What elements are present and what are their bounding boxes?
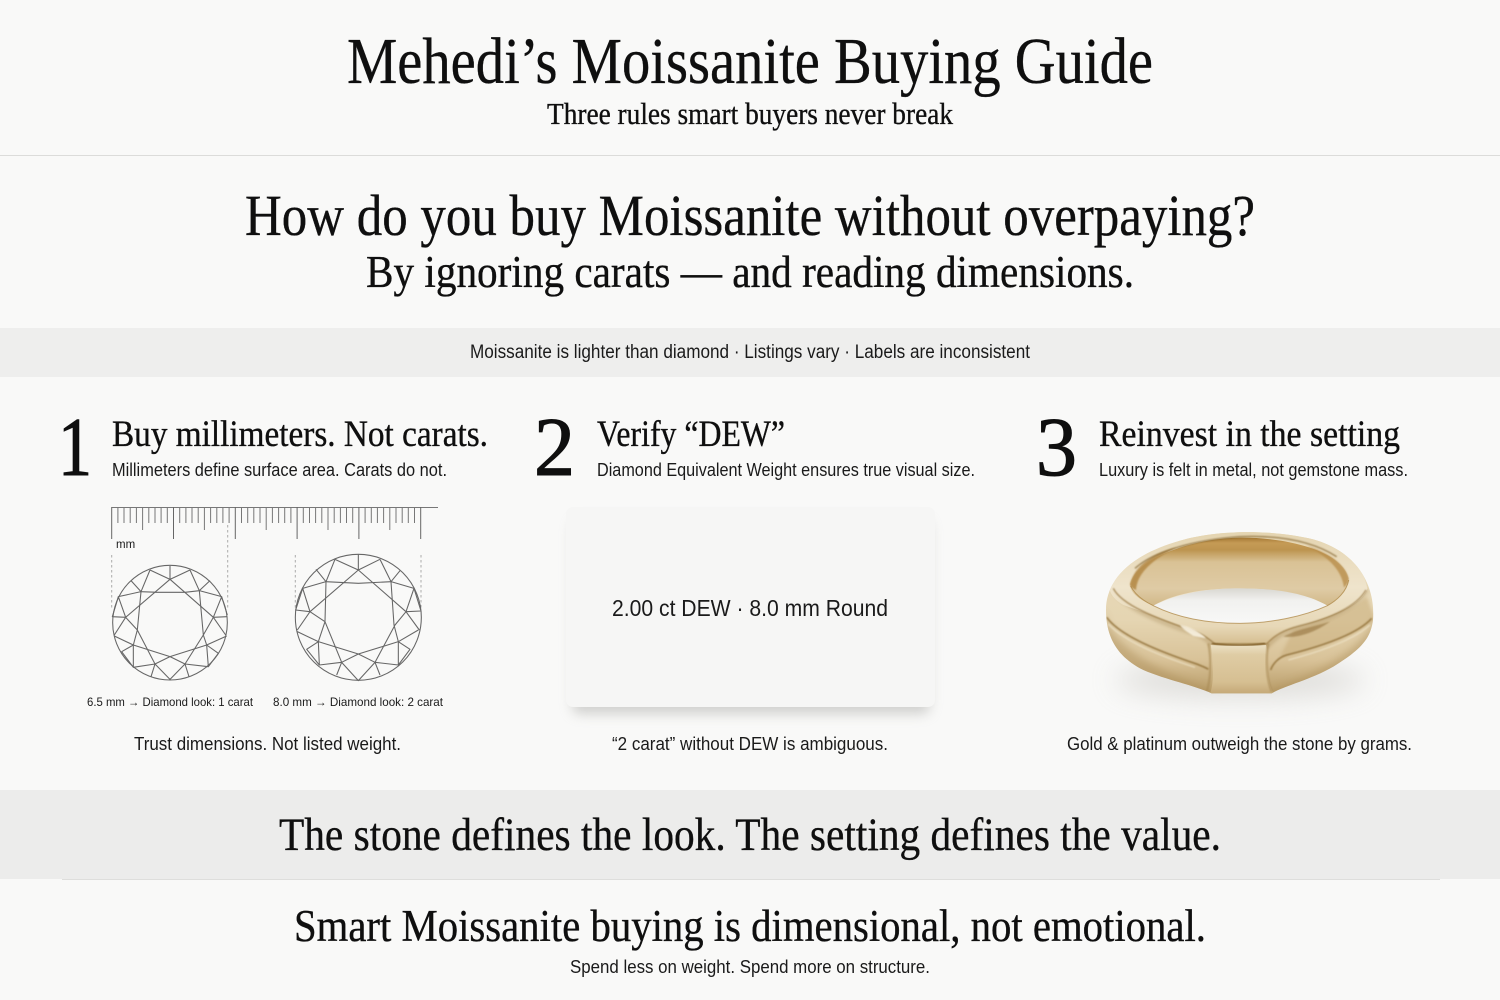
ring block top line [1212,643,1265,645]
rule 1 number: 1 [58,401,92,494]
panel: rule 3 [1036,401,1412,754]
main question heading: How do you buy Moissanite without overpaying? [245,183,1255,248]
subtitle: Three rules smart buyers never break [547,96,953,131]
rule 2 caption: “2 carat” without DEW is ambiguous. [612,734,888,754]
ring wall right crescent [1307,546,1349,587]
ring rim edge line [1113,588,1366,644]
ring body [1103,527,1377,697]
main answer subheading: By ignoring carats — and reading dimensions. [366,247,1134,297]
band: key facts [0,328,1500,377]
takeaway text: The stone defines the look. The setting defines the value. [279,809,1221,861]
ring groove right [1271,618,1372,670]
rule 3 heading: Reinvest in the setting [1099,414,1400,455]
icon: gold ring [1106,532,1374,694]
diagram: 6.5 mm stone [112,565,227,680]
ring centre block [1210,645,1274,694]
closing note: Spend less on weight. Spend more on structure. [570,957,930,977]
rule 1 caption: Trust dimensions. Not listed weight. [134,734,401,754]
panel: rule 1 [58,401,488,754]
ring rim shadow [1113,590,1367,647]
band: takeaway [0,790,1500,879]
closing statement: Smart Moissanite buying is dimensional, not emotional. [294,901,1206,951]
label: 8.0 mm: 8.0 mm → Diamond look: 2 carat [273,695,444,709]
ring block side shadows [1207,643,1210,692]
ring side shading [1106,619,1210,693]
ring groove left [1107,617,1208,669]
rule 1 heading: Buy millimeters. Not carats. [112,414,488,455]
ring top rim [1109,531,1367,643]
rule 2 description: Diamond Equivalent Weight ensures true visual size. [597,460,975,480]
diagram: 8.0 mm stone [295,554,421,681]
ring inner wall [1130,538,1349,606]
ring rim gleams [1180,625,1206,638]
label card [566,507,935,707]
card text: 2.00 ct DEW · 8.0 mm Round [612,595,888,621]
card shadow [572,520,930,714]
label: 6.5 mm: 6.5 mm → Diamond look: 1 carat [87,695,254,709]
ruler unit label: mm [116,539,135,551]
key facts text: Moissanite is lighter than diamond · Listings vary · Labels are inconsistent [470,342,1031,363]
ruler [112,507,438,539]
ring shadow [1115,662,1365,698]
panel: rule 2 [534,401,975,754]
rule 1 description: Millimeters define surface area. Carats do not. [112,460,447,480]
ring hole [1153,588,1327,623]
rule 2 number: 2 [534,401,575,494]
ring front lip [1131,580,1349,623]
rule 3 description: Luxury is felt in metal, not gemstone mass. [1099,460,1408,480]
rule 2 heading: Verify “DEW” [597,414,785,455]
dashed measure lines [112,525,421,610]
ring top lip dark line [1135,536,1337,568]
rule 3 number: 3 [1036,401,1077,494]
title: Mehedi’s Moissanite Buying Guide [347,25,1153,98]
ring wall left crescent [1130,547,1177,590]
rule 3 caption: Gold & platinum outweigh the stone by grams. [1067,734,1412,754]
